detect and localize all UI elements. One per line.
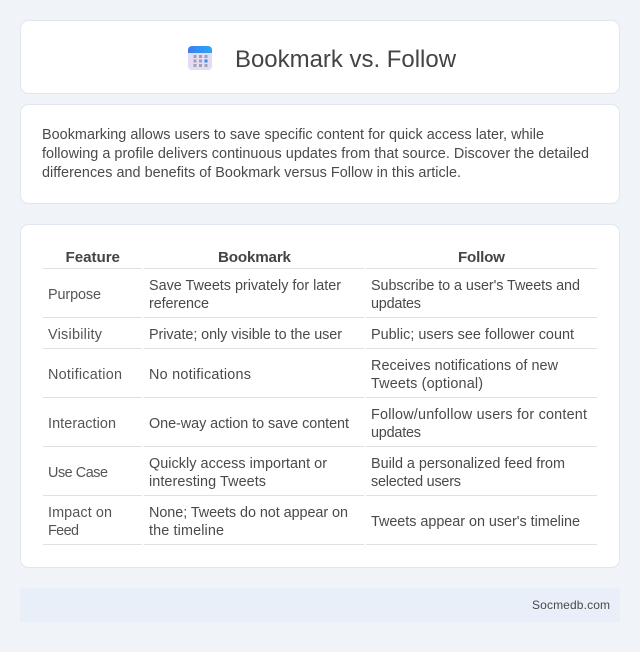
row: Notification: Tweets (optional) xyxy=(371,376,483,392)
row: Impact on Feed: None; Tweets do not appear on xyxy=(149,505,348,521)
row: Visibility: Private; only visible to the user xyxy=(149,327,342,343)
row: Purpose: reference xyxy=(149,296,209,312)
row: Purpose xyxy=(48,278,580,312)
row: Use Case: interesting Tweets xyxy=(149,474,266,490)
row: Notification xyxy=(48,358,559,392)
footer bar xyxy=(20,588,620,622)
footer source text: Socmedb.com xyxy=(532,598,610,612)
table header row xyxy=(66,249,505,266)
row: Interaction: updates xyxy=(371,425,421,441)
panel: comparison table xyxy=(20,224,620,568)
row: Notification: Notification xyxy=(48,367,122,383)
row: Impact on Feed: Tweets appear on user's timeline xyxy=(371,514,580,530)
row: Interaction: Interaction xyxy=(48,416,116,432)
table header row: Follow xyxy=(458,249,505,266)
row: Use Case: Use Case xyxy=(48,465,108,481)
row: Impact on Feed: the timeline xyxy=(149,523,224,539)
intro paragraph xyxy=(42,127,589,181)
row: Visibility xyxy=(48,327,574,343)
intro paragraph: following a profile delivers continuous updates from that source. Discover the detailed xyxy=(42,146,589,162)
row: Interaction xyxy=(48,407,587,441)
intro paragraph: differences and benefits of Bookmark versus Follow in this article. xyxy=(42,165,461,181)
row: Use Case: Quickly access important or xyxy=(149,456,327,472)
table header row: Feature xyxy=(66,249,120,266)
row: Use Case: Build a personalized feed from xyxy=(371,456,565,472)
panel: title header xyxy=(20,20,620,94)
row: Impact on Feed: Feed xyxy=(48,523,79,539)
intro paragraph: Bookmarking allows users to save specific content for quick access later, while xyxy=(42,127,544,143)
row: Visibility: Public; users see follower count xyxy=(371,327,574,343)
table header row: Bookmark xyxy=(218,249,292,266)
row: Purpose: Subscribe to a user's Tweets and xyxy=(371,278,580,294)
row: Impact on Feed: Impact on xyxy=(48,505,112,521)
title: Bookmark vs. Follow xyxy=(235,46,457,73)
row: Impact on Feed xyxy=(48,505,580,539)
row: Interaction: One-way action to save content xyxy=(149,416,349,432)
row: Use Case xyxy=(48,456,565,490)
row: Notification: Receives notifications of new xyxy=(371,358,559,374)
row: Use Case: selected users xyxy=(371,474,461,490)
row: Notification: No notifications xyxy=(149,367,251,383)
row: Interaction: Follow/unfollow users for content xyxy=(371,407,587,423)
icon: calendar xyxy=(188,46,212,70)
row: Visibility: Visibility xyxy=(48,327,103,343)
row: Purpose: updates xyxy=(371,296,421,312)
row: Purpose: Save Tweets privately for later xyxy=(149,278,341,294)
row: Purpose: Purpose xyxy=(48,287,101,303)
panel: intro text xyxy=(20,104,620,204)
